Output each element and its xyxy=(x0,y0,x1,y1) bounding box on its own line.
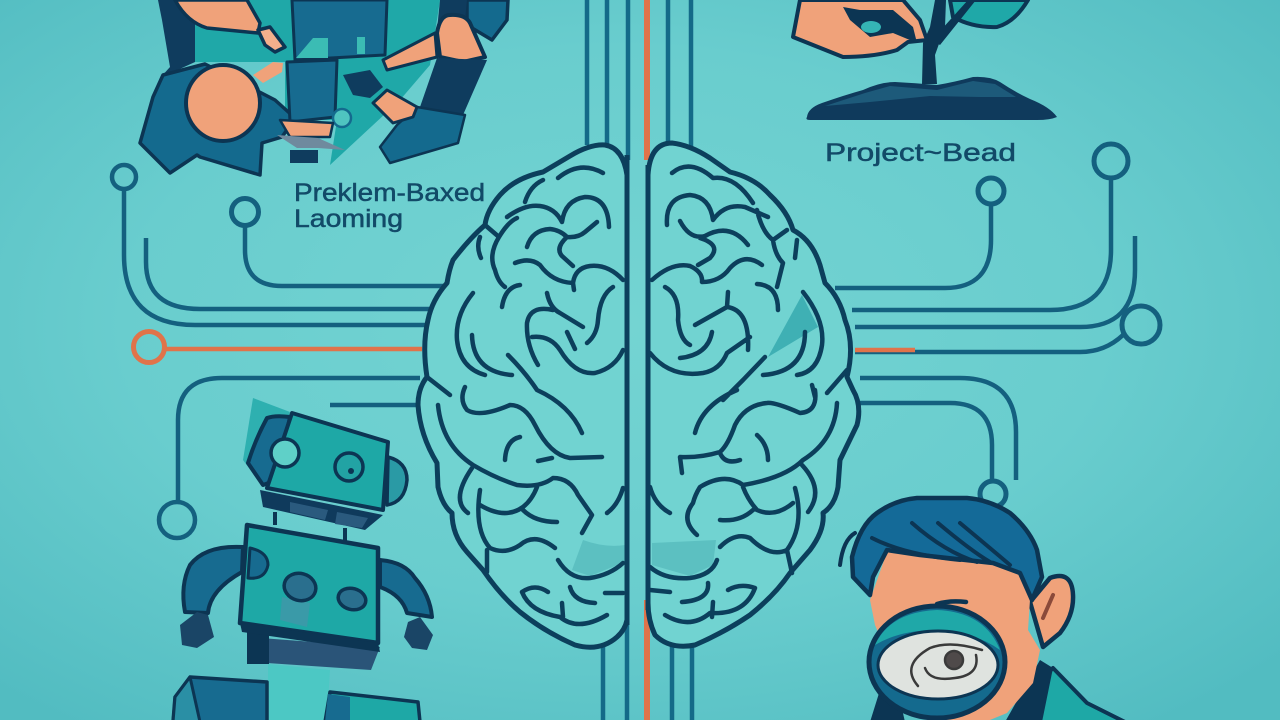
underside dark xyxy=(247,630,269,664)
puzzle pieces xyxy=(287,0,387,122)
right head xyxy=(437,15,485,62)
jacket xyxy=(1030,668,1125,720)
jaw highlight xyxy=(290,502,368,528)
connector: second right node xyxy=(835,178,1004,288)
left folds xyxy=(427,168,623,624)
left hemisphere xyxy=(418,145,627,647)
finger highlight xyxy=(861,21,881,33)
connector: orange left node xyxy=(134,332,422,362)
finger xyxy=(843,7,917,43)
label: problem based xyxy=(294,179,485,233)
legs underside xyxy=(247,637,380,670)
connector: far right node xyxy=(855,306,1160,352)
illustration: team solving puzzle xyxy=(140,0,508,175)
collar xyxy=(1005,660,1053,720)
ear inner xyxy=(1043,595,1053,618)
left hand xyxy=(180,612,214,648)
illustration: person with magnifying glass xyxy=(840,498,1125,720)
connector: short line xyxy=(330,403,418,407)
neck xyxy=(275,512,345,542)
dark fist xyxy=(343,70,383,98)
right outline xyxy=(648,143,859,646)
blue body left xyxy=(140,64,295,175)
connector: open line xyxy=(146,238,430,309)
body xyxy=(240,525,378,643)
connector: lower left node xyxy=(159,378,420,538)
eyebrow xyxy=(937,601,966,604)
tint behind head xyxy=(243,398,290,487)
right hand xyxy=(404,617,433,650)
brain divider right xyxy=(646,165,650,610)
connector: orange right stub xyxy=(855,348,915,352)
face xyxy=(870,552,1040,720)
brain interior fill xyxy=(418,143,859,647)
magnifier upper band xyxy=(875,610,1000,650)
left foot xyxy=(173,677,267,720)
label: project based: Project~Bead xyxy=(825,139,1016,167)
left circuit lines xyxy=(112,165,445,538)
leaf xyxy=(950,0,1028,27)
soil highlight xyxy=(825,81,1016,106)
small hand xyxy=(253,62,283,83)
right blue lower xyxy=(380,107,465,163)
hair strands xyxy=(840,523,1010,565)
connector: lower right node xyxy=(860,403,1006,507)
puzzle ring xyxy=(333,109,351,127)
column xyxy=(268,664,330,720)
magnifier handle xyxy=(870,690,905,720)
left outline xyxy=(418,145,627,647)
ear xyxy=(1030,576,1073,647)
connector: lower right line xyxy=(860,378,1016,480)
right blue top xyxy=(467,0,508,40)
label: problem based: Preklem-Baxed xyxy=(294,179,485,207)
connector: upper right node xyxy=(852,144,1128,310)
right lower arm xyxy=(373,90,417,123)
left eye xyxy=(271,439,299,467)
connector: open right line xyxy=(855,236,1135,327)
hand xyxy=(793,0,927,57)
body shade xyxy=(280,597,310,627)
illustration: hand planting seedling xyxy=(793,0,1057,120)
left arm xyxy=(183,547,243,613)
connector: upper left node xyxy=(112,165,425,325)
illustration: robot xyxy=(173,398,433,720)
brain tint shapes xyxy=(572,295,818,576)
stem xyxy=(922,0,976,84)
jaw xyxy=(260,490,383,530)
magnified eye xyxy=(911,644,982,686)
right foot xyxy=(325,692,420,720)
right arm xyxy=(380,560,432,617)
body base band xyxy=(240,623,380,652)
skin arm top left xyxy=(175,0,285,52)
right circuit lines xyxy=(835,144,1160,507)
label: problem based: Laoming xyxy=(294,205,403,233)
magnifier lens xyxy=(878,631,998,699)
hair xyxy=(852,498,1042,600)
dark shoulder left xyxy=(158,0,195,78)
right eye xyxy=(335,453,363,481)
head side xyxy=(248,416,290,485)
bottom hand xyxy=(280,120,333,137)
table shadow xyxy=(277,135,345,150)
magnifier rim xyxy=(869,606,1005,718)
right dark top xyxy=(437,0,467,30)
central vertical lines xyxy=(587,0,692,720)
right dark torso xyxy=(420,58,487,115)
brain xyxy=(418,143,859,647)
connector: second left node xyxy=(232,198,445,286)
body bump xyxy=(248,548,268,578)
right upper arm xyxy=(383,33,437,70)
teal backdrop xyxy=(195,0,440,165)
button 2 xyxy=(336,585,368,613)
dark box xyxy=(290,150,318,163)
brain divider left xyxy=(624,155,630,625)
button 1 xyxy=(281,570,319,604)
right folds xyxy=(650,167,847,622)
ear xyxy=(387,457,407,505)
right hemisphere xyxy=(648,143,859,646)
head xyxy=(267,413,388,510)
head left xyxy=(186,65,260,141)
soil xyxy=(806,77,1057,120)
